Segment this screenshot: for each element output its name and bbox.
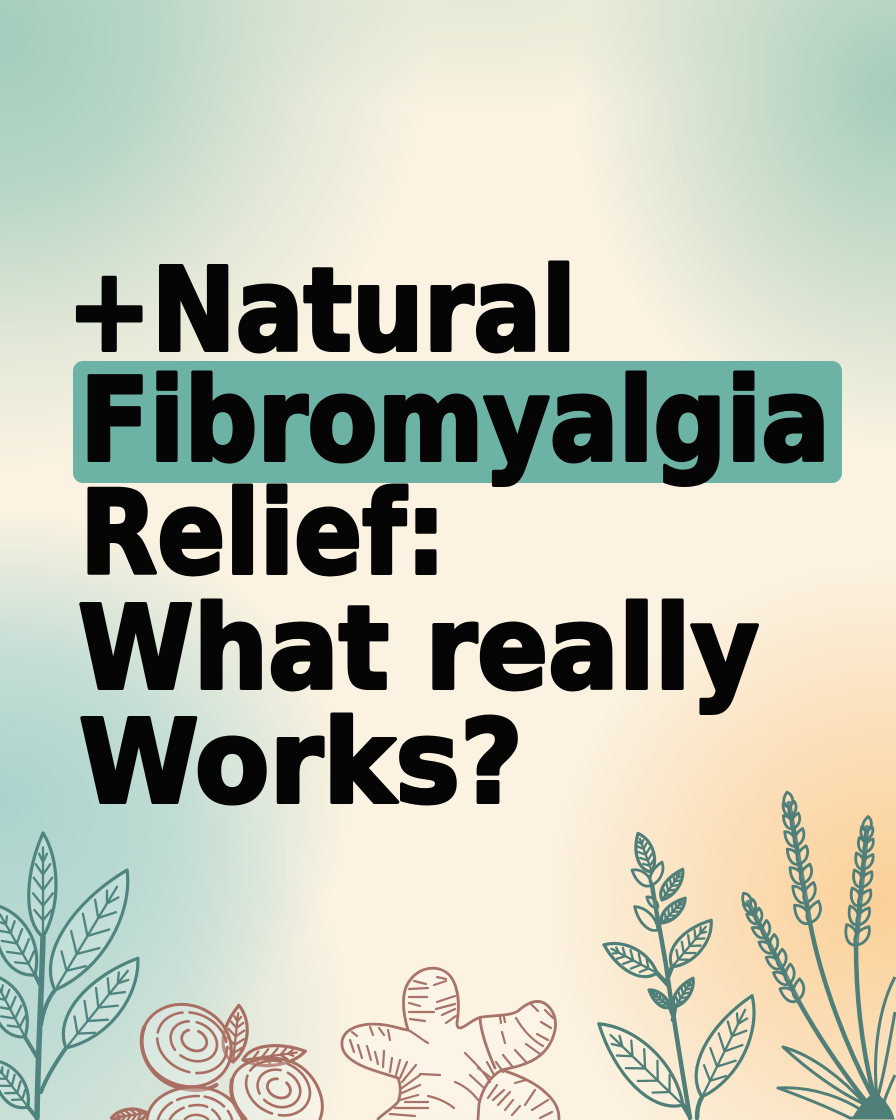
icon: ginger root xyxy=(342,968,559,1119)
title highlight bar xyxy=(73,361,842,483)
lavender stems xyxy=(798,923,875,1103)
slice 2 xyxy=(231,1050,322,1120)
slice 1 xyxy=(127,990,245,1103)
ginger outline xyxy=(342,968,559,1119)
ginger hatching xyxy=(350,977,553,1118)
title xyxy=(67,244,842,830)
title line: Relief:: Relief: xyxy=(80,467,446,601)
title line: What really: What really xyxy=(78,582,759,716)
slice 3 xyxy=(147,1087,242,1119)
icon: turmeric root slices xyxy=(110,990,322,1120)
small leaves xyxy=(110,1004,307,1120)
ginger segment lines xyxy=(478,1018,502,1119)
lavender base blades xyxy=(778,977,895,1119)
icon: left leafy branch xyxy=(0,833,153,1118)
title line: +Natural: +Natural xyxy=(67,244,576,378)
title line: Works?: Works? xyxy=(79,696,523,830)
icon: lavender stalks xyxy=(730,789,895,1119)
icon: green herb sprig xyxy=(585,831,769,1120)
lavender flower spikes xyxy=(730,789,884,1010)
